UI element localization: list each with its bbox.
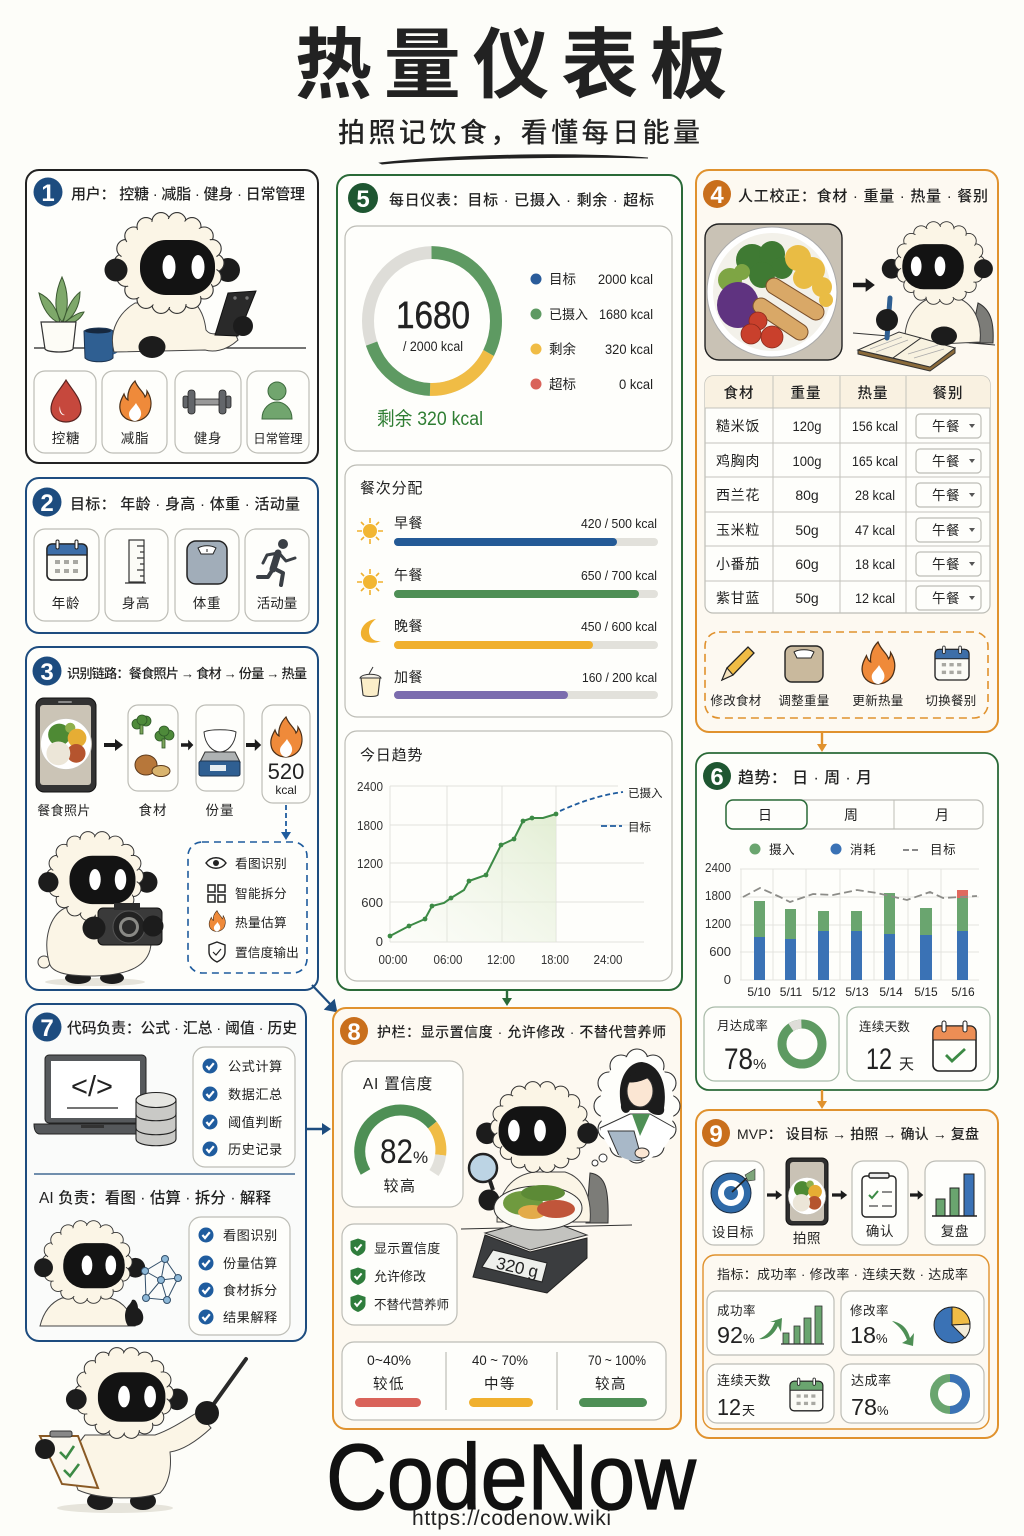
arrow <box>910 1190 923 1200</box>
row: dinner <box>361 618 658 649</box>
metric: achievement rate <box>841 1364 984 1423</box>
meal dropdowns: 午餐 <box>932 419 960 434</box>
card: confidence ranges: 70 ~ 100% <box>588 1352 646 1368</box>
row: lunch <box>357 567 658 598</box>
panel 3: recognition chain <box>26 647 318 990</box>
heading 7: 代码负责：公式 · 汇总 · 阈值 · 历史 <box>67 1020 297 1037</box>
card: meal allocation <box>345 465 672 717</box>
icon: blood drop <box>51 380 81 422</box>
metric: edit rate: 修改率 <box>850 1303 889 1318</box>
step: take photo <box>786 1158 828 1246</box>
mascot writing in notebook <box>853 222 995 371</box>
heading 4: 人工校正：食材 · 重量 · 热量 · 餐别 <box>738 187 988 205</box>
checklist: code: 公式计算 <box>228 1059 283 1074</box>
card: AI confidence gauge: 较高 <box>383 1177 417 1195</box>
mascot with network <box>34 1221 182 1326</box>
badge 8 <box>340 1017 368 1046</box>
metric: streak: 天 <box>742 1403 755 1418</box>
card: AI confidence gauge: AI 置信度 <box>363 1075 433 1093</box>
card: calorie donut: 剩余 320 kcal <box>377 408 483 430</box>
stacked bar chart: 600 <box>709 944 731 959</box>
legend: 目标 <box>549 272 576 287</box>
donut chart <box>368 253 496 389</box>
subtitle <box>338 118 700 164</box>
table: foods: 鸡胸肉 <box>716 453 760 469</box>
meal dropdowns: 午餐 <box>932 454 960 469</box>
arrow <box>832 1190 847 1200</box>
card: today trend chart: 12:00 <box>487 952 515 967</box>
table: foods: 18 kcal <box>855 556 895 572</box>
card: calories: kcal <box>275 783 297 797</box>
card: 体重 <box>175 529 239 621</box>
arrow <box>853 278 875 292</box>
stacked bar chart <box>705 860 979 999</box>
card: today trend chart: 24:00 <box>594 952 622 967</box>
checklist: code: 数据汇总 <box>228 1087 283 1102</box>
icon: person <box>262 382 292 419</box>
card: confidence ranges: 较高 <box>595 1375 627 1393</box>
card: AI confidence gauge: % <box>413 1148 428 1167</box>
metric: streak: 连续天数 <box>717 1373 771 1388</box>
stacked bar chart: 5/12 <box>812 985 836 999</box>
card: today trend chart: 目标 <box>628 821 651 834</box>
card: 身高: 身高 <box>122 595 150 611</box>
row: breakfast: 420 / 500 kcal <box>581 516 657 531</box>
icon: ruler <box>125 540 146 583</box>
arrow <box>104 739 123 751</box>
checklist: code: 历史记录 <box>228 1142 283 1157</box>
heading 2: 目标： 年龄 · 身高 · 体重 · 活动量 <box>70 496 300 513</box>
arrow <box>181 740 193 750</box>
badge 6 <box>703 762 731 791</box>
panel 2: goals <box>26 478 318 633</box>
dashed AI capability box: 置信度输出 <box>235 945 299 960</box>
card: 年龄 <box>34 529 99 621</box>
dashed AI capability box: 热量估算 <box>235 916 287 930</box>
metric: streak: 12 <box>717 1394 741 1420</box>
table: foods: 156 kcal <box>852 418 898 434</box>
badge 4: 4 <box>710 182 724 209</box>
heading 3: 识别链路：餐食照片 → 食材 → 份量 → 热量 <box>67 665 307 681</box>
heading 9: MVP： 设目标 → 拍照 → 确认 → 复盘 <box>737 1126 979 1142</box>
stat card: monthly rate: 78 <box>724 1043 753 1076</box>
dashed AI capability box: 看图识别 <box>235 857 287 871</box>
card: 健身: 健身 <box>194 431 222 446</box>
meal dropdowns: 午餐 <box>932 557 960 572</box>
legend: 320 kcal <box>605 341 653 357</box>
illustration: mascot weighing food <box>461 1082 632 1293</box>
card: 控糖: 控糖 <box>52 431 80 446</box>
stat card: monthly rate: 月达成率 <box>717 1018 768 1033</box>
card: confidence ranges: 40 ~ 70% <box>472 1352 528 1368</box>
heading 6: 趋势： 日 · 周 · 月 <box>738 769 872 787</box>
thought bubble: nutritionist <box>592 1049 680 1170</box>
card: today trend chart: 06:00 <box>434 952 462 967</box>
stacked bar chart: 5/16 <box>951 985 975 999</box>
legend: 剩余 <box>549 341 576 357</box>
arrow: panel 7 to panel 8 <box>306 1123 331 1135</box>
metric: achievement rate: 78 <box>851 1394 877 1420</box>
icon: runner <box>258 539 295 585</box>
chart legend: 目标 <box>930 843 956 857</box>
subtitle: 拍照记饮食，看懂每日能量 <box>338 118 700 148</box>
table: foods: 紫甘蓝 <box>716 590 760 606</box>
box: metrics <box>703 1255 989 1429</box>
mascot: presenter with pointer and clipboard <box>35 1348 246 1513</box>
illustration: mascot at desk <box>34 213 306 362</box>
badge 5: 5 <box>356 186 370 213</box>
stacked bar chart: 5/13 <box>845 985 869 999</box>
metric: success rate: 成功率 <box>717 1303 756 1318</box>
card: AI confidence gauge <box>342 1061 463 1207</box>
stacked bar chart: 0 <box>724 972 731 987</box>
row: snack: 160 / 200 kcal <box>582 670 657 685</box>
checklist: code: 阈值判断 <box>228 1115 283 1130</box>
stat card: streak <box>847 1007 990 1081</box>
table: foods: 80g <box>795 487 819 503</box>
badge 9: 9 <box>709 1121 723 1148</box>
card: 日常管理: 日常管理 <box>253 431 303 446</box>
card: today trend chart: 1800 <box>357 818 383 833</box>
chart legend <box>750 842 956 857</box>
card: ingredients: 食材 <box>138 802 168 818</box>
card: confidence ranges <box>342 1342 666 1420</box>
icon: flame <box>209 911 225 931</box>
dashed AI capability box: 智能拆分 <box>235 887 287 901</box>
badge 7 <box>32 1012 62 1042</box>
legend: 2000 kcal <box>598 271 653 287</box>
icon: grid <box>208 885 225 902</box>
icon: calendar <box>935 646 969 680</box>
badge 2 <box>32 488 62 517</box>
period tabs: 日 <box>758 807 772 823</box>
period tabs: 周 <box>844 807 858 823</box>
table: foods: 糙米饭 <box>716 418 760 434</box>
badge 7: 7 <box>40 1015 54 1042</box>
card: portion: 份量 <box>206 803 234 818</box>
row: lunch: 650 / 700 kcal <box>581 568 657 583</box>
meal dropdowns: 午餐 <box>932 591 960 606</box>
icon: flame <box>862 642 895 684</box>
icon: laptop with code and database <box>34 1055 176 1146</box>
url: https://codenow.wiki <box>412 1507 611 1530</box>
metric: achievement rate: 达成率 <box>851 1373 892 1388</box>
card: 健身 <box>175 371 241 453</box>
row: dinner: 晚餐 <box>394 618 423 634</box>
legend <box>530 271 653 392</box>
badge 8: 8 <box>347 1019 361 1046</box>
panel 1: users <box>26 170 318 463</box>
metric: success rate <box>707 1291 834 1355</box>
badge 1: 1 <box>41 180 55 207</box>
checklist: code <box>193 1047 295 1167</box>
badge 4 <box>703 180 731 209</box>
card: today trend chart: 18:00 <box>541 952 569 967</box>
stacked bar chart: 1800 <box>705 888 731 903</box>
arrow: panel 5 to panel 8 <box>502 990 512 1006</box>
metric: success rate: % <box>743 1331 755 1346</box>
metric: success rate: 92 <box>717 1322 743 1348</box>
step: confirm: 确认 <box>866 1224 894 1239</box>
meal dropdowns <box>916 414 981 610</box>
card: confidence ranges: 中等 <box>484 1375 516 1393</box>
icon: eye <box>206 858 226 868</box>
mascot with camera <box>38 832 164 986</box>
metric: edit rate: % <box>876 1331 888 1346</box>
chart legend: 消耗 <box>850 843 876 857</box>
table: foods: 120g <box>792 418 822 434</box>
stat card: streak: 12 <box>866 1043 892 1076</box>
icon: dumbbell <box>183 390 231 414</box>
card: guardrail checks: 不替代营养师 <box>374 1297 449 1312</box>
icon: laptop with code and database: </> <box>71 1071 113 1103</box>
card: 减脂 <box>102 371 167 453</box>
stacked bar chart: 5/11 <box>780 985 803 999</box>
table: foods: 28 kcal <box>855 487 895 503</box>
card: today trend chart <box>345 731 672 981</box>
card: today trend chart: 2400 <box>357 779 383 794</box>
table: foods: 重量 <box>790 385 822 402</box>
table: foods: 热量 <box>858 384 888 402</box>
heading 5: 每日仪表：目标 · 已摄入 · 剩余 · 超标 <box>389 191 654 209</box>
dashed AI capability box <box>188 842 307 973</box>
illustration: mascot weighing food: 320 g <box>494 1254 540 1282</box>
period tabs: 月 <box>935 807 949 823</box>
arrow: panel 6 to panel 9 <box>817 1090 827 1109</box>
table: foods: 47 kcal <box>855 522 895 538</box>
card: today trend chart: 已摄入 <box>628 786 663 800</box>
step: set target: 设目标 <box>712 1225 754 1240</box>
icon: flame <box>120 381 151 421</box>
step: review <box>925 1161 985 1245</box>
row: breakfast: 早餐 <box>394 515 423 531</box>
card: guardrail checks <box>342 1224 457 1325</box>
meal photo <box>705 224 842 360</box>
box: metrics: 指标：成功率 · 修改率 · 连续天数 · 达成率 <box>717 1267 968 1282</box>
stat card: streak: 连续天数 <box>859 1019 910 1034</box>
card: 活动量 <box>245 529 309 621</box>
chart legend: 摄入 <box>769 842 795 857</box>
panel 5: daily dashboard <box>337 175 682 990</box>
legend: 超标 <box>549 377 576 392</box>
table: foods: 60g <box>795 556 819 572</box>
table: foods: 小番茄 <box>716 556 760 572</box>
badge 9 <box>702 1119 730 1148</box>
icon: target <box>711 1169 755 1213</box>
card: today trend chart: 00:00 <box>378 952 408 967</box>
card: 活动量: 活动量 <box>257 596 297 611</box>
dashed correction actions <box>705 632 988 718</box>
legend: 1680 kcal <box>599 306 653 322</box>
card: calorie donut <box>345 226 672 451</box>
meal dropdowns: 午餐 <box>932 488 960 503</box>
table: foods <box>705 376 990 613</box>
card: guardrail checks: 允许修改 <box>374 1269 426 1284</box>
step: confirm <box>852 1161 908 1245</box>
card: calories <box>262 705 310 803</box>
table: foods: 50g <box>795 522 819 538</box>
card: 日常管理 <box>247 371 309 453</box>
stat card: monthly rate <box>704 1007 839 1081</box>
metric: streak <box>707 1364 834 1423</box>
dashed arrow <box>281 805 291 840</box>
heading 8: 护栏：显示置信度 · 允许修改 · 不替代营养师 <box>377 1024 666 1040</box>
card: 年龄: 年龄 <box>52 596 80 611</box>
icon: checklist <box>862 1173 896 1217</box>
card: confidence ranges: 较低 <box>373 1375 405 1393</box>
stacked bar chart: 2400 <box>705 860 731 875</box>
icon: pencil <box>722 647 754 680</box>
step: set target <box>703 1161 764 1245</box>
table: foods: 西兰花 <box>716 487 760 503</box>
checklist: AI: 份量估算 <box>223 1256 278 1271</box>
card: 体重: 体重 <box>193 596 221 611</box>
checklist: AI <box>189 1217 290 1335</box>
phone with meal photo <box>36 698 96 818</box>
badge 3: 3 <box>40 659 54 686</box>
table: foods: 餐别 <box>932 385 964 402</box>
stat card: streak: 天 <box>899 1056 914 1073</box>
heading: AI responsibilities: AI 负责：看图 · 估算 · 拆分 · 解释 <box>39 1188 271 1207</box>
metric: edit rate <box>841 1291 984 1355</box>
row: snack: 加餐 <box>394 669 423 685</box>
arrow <box>246 739 261 751</box>
metric: edit rate: 18 <box>850 1322 876 1348</box>
meal dropdowns: 午餐 <box>932 523 960 538</box>
panel 6: trends <box>696 753 998 1090</box>
dashed correction actions: 切换餐别 <box>925 693 977 708</box>
card: ingredients <box>128 705 178 818</box>
card: AI confidence gauge: 82 <box>380 1133 413 1171</box>
checklist: AI: 结果解释 <box>223 1310 278 1325</box>
icon: scale <box>187 541 227 584</box>
heading 1: 用户： 控糖 · 减脂 · 健身 · 日常管理 <box>71 185 305 203</box>
panel 7: code and AI responsibilities <box>26 1004 306 1341</box>
panel 9: MVP <box>696 1110 998 1438</box>
arrow: panel 4 to panel 6 <box>817 732 827 752</box>
stat card: monthly rate: % <box>753 1056 766 1073</box>
card: 控糖 <box>34 371 96 453</box>
table: foods: 100g <box>792 453 822 469</box>
badge 6: 6 <box>710 764 724 791</box>
dashed correction actions: 修改食材 <box>710 693 762 708</box>
badge 2: 2 <box>40 490 54 517</box>
icon: bars <box>932 1174 977 1216</box>
table: foods: 玉米粒 <box>716 522 760 538</box>
icon: shield <box>209 942 225 962</box>
card: calorie donut: / 2000 kcal <box>403 339 463 354</box>
card: calorie donut: 1680 <box>396 295 470 337</box>
icon: scale <box>785 646 823 682</box>
card: today trend chart: 今日趋势 <box>360 747 423 764</box>
dashed correction actions: 更新热量 <box>852 693 904 708</box>
step: review: 复盘 <box>941 1223 969 1239</box>
period tabs <box>726 800 983 829</box>
card: calories: 520 <box>268 759 304 784</box>
table: foods: 食材 <box>724 384 754 402</box>
stacked bar chart: 5/10 <box>747 985 771 999</box>
card: today trend chart: 0 <box>376 934 383 949</box>
legend: 已摄入 <box>549 307 588 322</box>
logo: CodeNow: CodeNow <box>326 1425 697 1529</box>
row: lunch: 午餐 <box>394 567 423 583</box>
stacked bar chart: 5/14 <box>879 985 903 999</box>
title: 热量仪表板 <box>295 23 727 109</box>
arrow: panel 3 to panel 8 <box>312 985 336 1011</box>
badge 5 <box>348 183 378 213</box>
step: take photo: 拍照 <box>793 1231 821 1246</box>
metric: achievement rate: % <box>877 1403 889 1418</box>
card: confidence ranges: 0~40% <box>367 1352 411 1368</box>
arrow <box>767 1190 782 1200</box>
badge 1 <box>34 178 62 207</box>
table: foods: 165 kcal <box>852 453 898 469</box>
checklist: AI: 食材拆分 <box>223 1282 278 1298</box>
row: snack <box>360 667 658 699</box>
stacked bar chart: 1200 <box>705 916 731 931</box>
row: dinner: 450 / 600 kcal <box>581 619 657 634</box>
icon: calendar with check <box>933 1021 976 1071</box>
checklist: AI: 看图识别 <box>223 1228 278 1243</box>
card: today trend chart: 1200 <box>357 856 383 871</box>
phone with meal photo: 餐食照片 <box>37 803 91 818</box>
panel 4: manual correction <box>696 170 998 732</box>
card: meal allocation: 餐次分配 <box>360 480 423 497</box>
table: foods: 12 kcal <box>855 590 895 606</box>
card: portion <box>196 705 244 818</box>
card: guardrail checks: 显示置信度 <box>374 1241 441 1256</box>
card: 减脂: 减脂 <box>121 431 149 446</box>
card: 身高 <box>105 529 168 621</box>
card: today trend chart: 600 <box>361 895 383 910</box>
legend: 0 kcal <box>619 376 653 392</box>
table: foods: 50g <box>795 590 819 606</box>
dashed correction actions: 调整重量 <box>778 693 830 708</box>
badge 3 <box>32 656 62 686</box>
stacked bar chart: 5/15 <box>914 985 938 999</box>
panel 8: guardrails <box>333 1008 681 1429</box>
icon: calendar <box>47 540 87 580</box>
row: breakfast <box>357 515 658 546</box>
